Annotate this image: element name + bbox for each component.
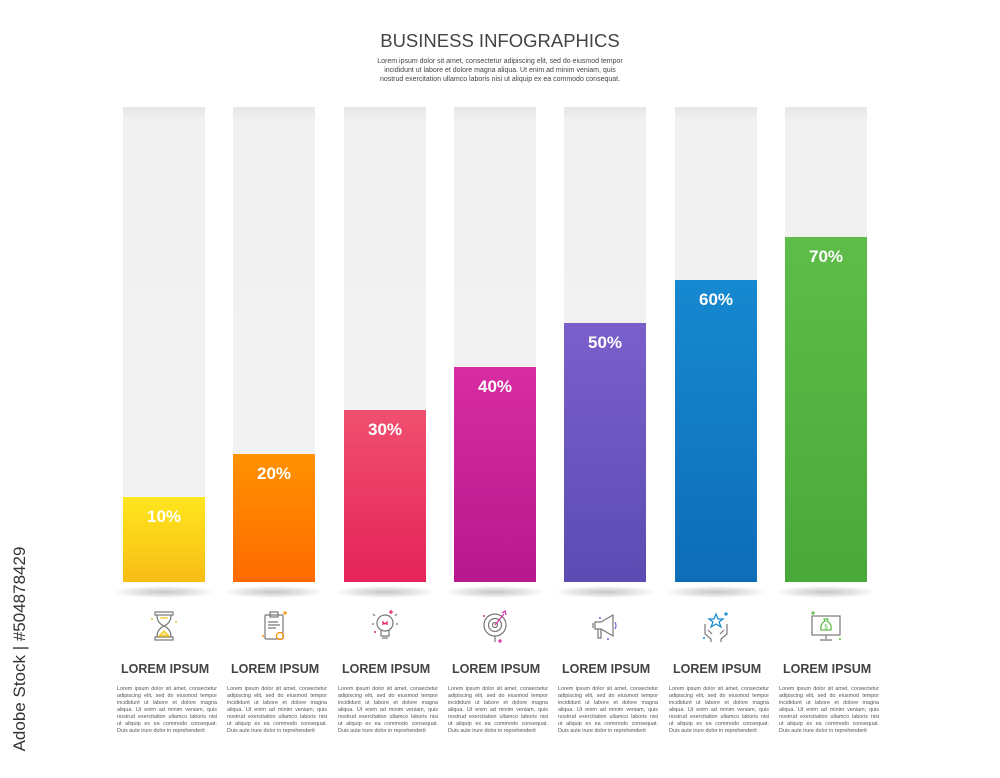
column 6 text <box>669 662 769 734</box>
bar 4: 40% <box>454 107 536 582</box>
bar 7: 70%: 70% <box>809 247 843 266</box>
column 3 text: Lorem ipsum dolor sit amet, consectetur adipiscing elit, sed do eiusmod tempor incididunt ut labore et dolore magna aliqua. Ut enim ad minim veniam, quis nostrud exercitation ullamco laboris nisi ut aliquip ex ea commodo consequat. Duis aute irure dolor in reprehenderit <box>338 686 438 734</box>
bar 1: 10%: 10% <box>147 507 181 526</box>
column 3 text <box>338 662 438 734</box>
bar 3: 30% <box>344 107 426 582</box>
column 4 text: LOREM IPSUM <box>452 662 540 676</box>
watermark: Adobe Stock id: Adobe Stock | #504878429 <box>10 547 29 751</box>
column 1 text: LOREM IPSUM <box>121 662 209 676</box>
column 4 text: Lorem ipsum dolor sit amet, consectetur adipiscing elit, sed do eiusmod tempor incididunt ut labore et dolore magna aliqua. Ut enim ad minim veniam, quis nostrud exercitation ullamco laboris nisi ut aliquip ex ea commodo consequat. Duis aute irure dolor in reprehenderit <box>448 686 548 734</box>
column 7 text <box>779 662 879 734</box>
subtitle text: Lorem ipsum dolor sit amet, consectetur adipiscing elit, sed do eiusmod tempor <box>377 58 623 65</box>
bar 4: 40%: 40% <box>478 377 512 396</box>
bar 2: 20%: 20% <box>257 464 291 483</box>
bar 2: 20% <box>233 107 315 582</box>
title: BUSINESS INFOGRAPHICS <box>380 30 620 51</box>
column 4 text <box>448 662 548 734</box>
column 6 text: LOREM IPSUM <box>673 662 761 676</box>
bar 7: 70% <box>785 107 867 582</box>
icon: light bulb <box>372 610 398 639</box>
column 3 text: LOREM IPSUM <box>342 662 430 676</box>
column 6 text: Lorem ipsum dolor sit amet, consectetur adipiscing elit, sed do eiusmod tempor incididunt ut labore et dolore magna aliqua. Ut enim ad minim veniam, quis nostrud exercitation ullamco laboris nisi ut aliquip ex ea commodo consequat. Duis aute irure dolor in reprehenderit <box>669 686 769 734</box>
icon: monitor with money bag <box>811 611 841 641</box>
column 5 text <box>558 662 658 734</box>
column 7 text: LOREM IPSUM <box>783 662 871 676</box>
bar 1: 10% <box>123 107 205 582</box>
column 1 text: Lorem ipsum dolor sit amet, consectetur adipiscing elit, sed do eiusmod tempor incididunt ut labore et dolore magna aliqua. Ut enim ad minim veniam, quis nostrud exercitation ullamco laboris nisi ut aliquip ex ea commodo consequat. Duis aute irure dolor in reprehenderit <box>117 686 217 734</box>
column 2 text: LOREM IPSUM <box>231 662 319 676</box>
column 1 text <box>117 662 217 734</box>
bar 6: 60%: 60% <box>699 290 733 309</box>
icon: target <box>483 610 507 643</box>
subtitle text <box>377 58 623 83</box>
column 5 text: Lorem ipsum dolor sit amet, consectetur adipiscing elit, sed do eiusmod tempor incididunt ut labore et dolore magna aliqua. Ut enim ad minim veniam, quis nostrud exercitation ullamco laboris nisi ut aliquip ex ea commodo consequat. Duis aute irure dolor in reprehenderit <box>558 686 658 734</box>
column 5 text: LOREM IPSUM <box>562 662 650 676</box>
bar 6: 60% <box>675 107 757 582</box>
icon: monitor with money bag: $ <box>824 625 828 631</box>
icon: hands with star <box>703 612 728 642</box>
column 2 text <box>227 662 327 734</box>
icon: megaphone <box>592 614 617 640</box>
bar 3: 30%: 30% <box>368 420 402 439</box>
column 2 text: Lorem ipsum dolor sit amet, consectetur adipiscing elit, sed do eiusmod tempor incididunt ut labore et dolore magna aliqua. Ut enim ad minim veniam, quis nostrud exercitation ullamco laboris nisi ut aliquip ex ea commodo consequat. Duis aute irure dolor in reprehenderit <box>227 686 327 734</box>
bar 5: 50%: 50% <box>588 333 622 352</box>
bar shadows <box>120 586 870 598</box>
bar 5: 50% <box>564 107 646 582</box>
icon: clipboard <box>262 611 287 640</box>
subtitle text: nostrud exercitation ullamco laboris nisi ut aliquip ex ea commodo consequat. <box>380 76 620 83</box>
icon: hourglass <box>151 611 177 641</box>
subtitle text: incididunt ut labore et dolore magna aliqua. Ut enim ad minim veniam, quis <box>384 67 616 74</box>
column 7 text: Lorem ipsum dolor sit amet, consectetur adipiscing elit, sed do eiusmod tempor incididunt ut labore et dolore magna aliqua. Ut enim ad minim veniam, quis nostrud exercitation ullamco laboris nisi ut aliquip ex ea commodo consequat. Duis aute irure dolor in reprehenderit <box>779 686 879 734</box>
